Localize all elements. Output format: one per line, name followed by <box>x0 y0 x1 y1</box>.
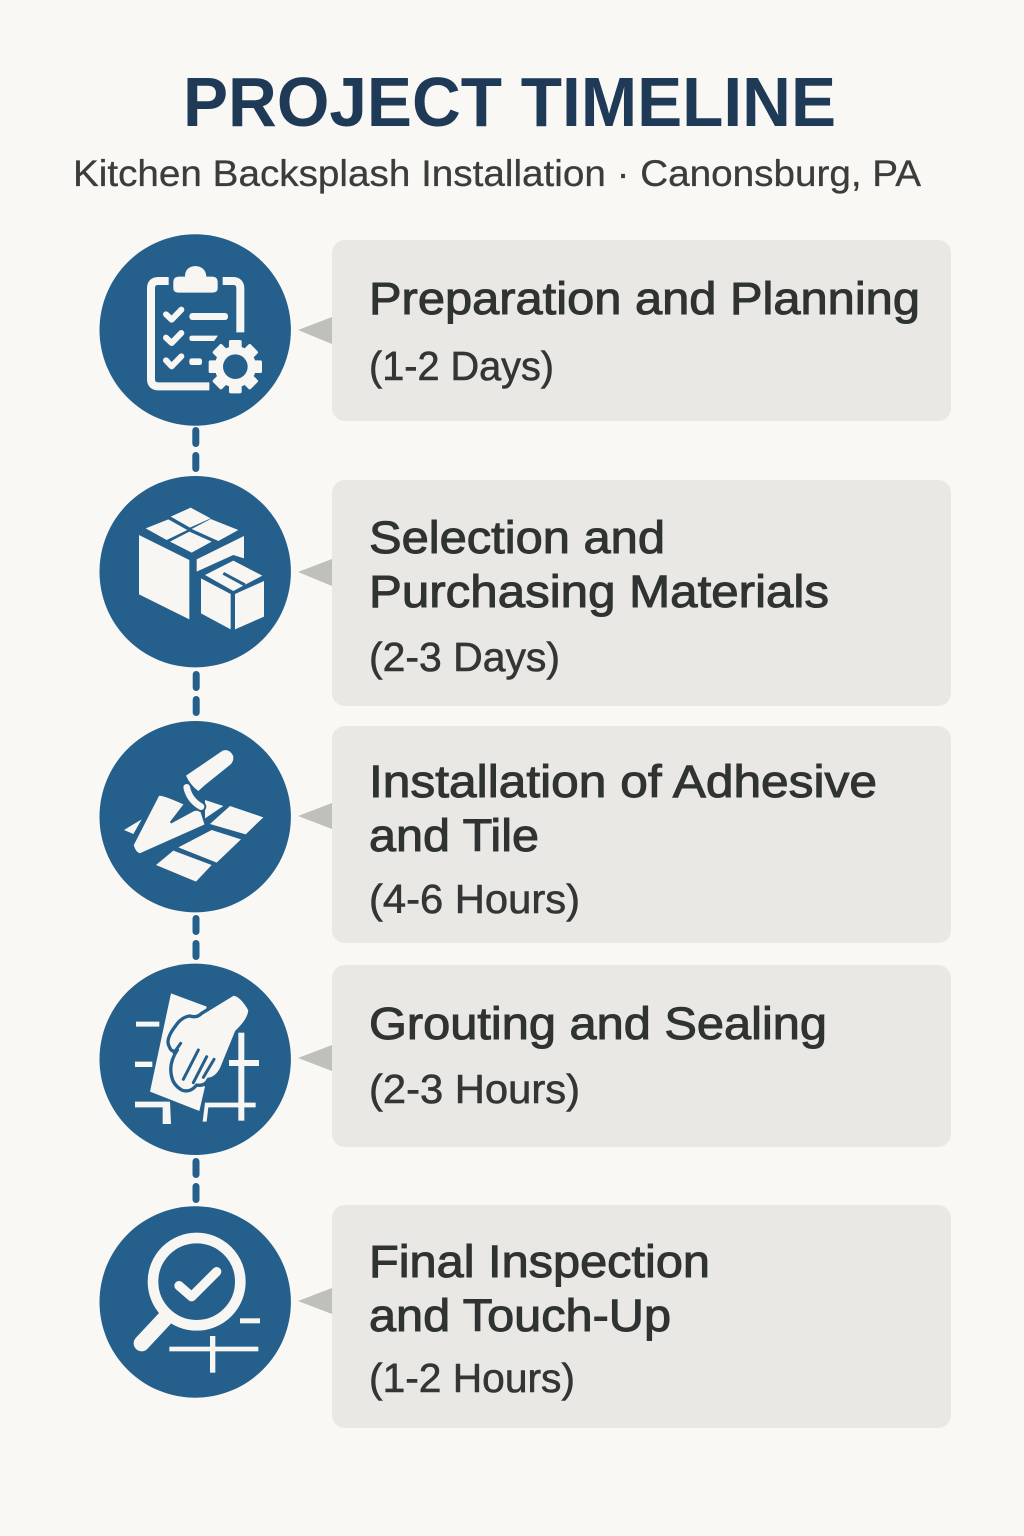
step duration: (4-6 Hours) <box>369 876 580 922</box>
card <box>332 240 951 421</box>
pointer <box>298 317 332 344</box>
circle badge with hand and grout float icon <box>100 964 291 1155</box>
card <box>332 480 951 706</box>
step title: Installation of Adhesive <box>369 756 877 807</box>
step title: Selection and <box>369 512 665 563</box>
step duration: (2-3 Days) <box>369 634 560 680</box>
step title <box>369 1236 710 1341</box>
step title <box>369 512 829 617</box>
pointer <box>298 1045 332 1071</box>
connector: step 2 to 3 <box>193 671 200 716</box>
card <box>332 1205 951 1428</box>
step duration: (1-2 Hours) <box>369 1355 575 1401</box>
step title: Grouting and Sealing <box>369 998 827 1049</box>
connector: step 4 to 5 <box>192 1158 200 1203</box>
circle badge with boxes icon <box>100 476 291 667</box>
step title: Final Inspection <box>369 1236 710 1287</box>
card <box>332 965 951 1147</box>
pointer <box>298 559 332 586</box>
step title <box>369 756 877 861</box>
step title: and Touch-Up <box>369 1290 671 1341</box>
step title: Purchasing Materials <box>369 566 829 617</box>
step 2: selection and purchasing materials <box>100 476 951 706</box>
circle badge with trowel and tile icon <box>100 721 291 912</box>
connector: step 1 to 2 <box>192 427 199 472</box>
step title: and Tile <box>369 810 539 861</box>
card <box>332 726 951 943</box>
step title: Preparation and Planning <box>369 273 920 324</box>
title: PROJECT TIMELINE <box>183 63 836 141</box>
step 4: grouting and sealing <box>100 964 951 1155</box>
connector: step 3 to 4 <box>192 915 200 960</box>
step duration: (2-3 Hours) <box>369 1066 580 1112</box>
step duration: (1-2 Days) <box>369 343 554 389</box>
circle badge with magnifier icon <box>100 1206 291 1398</box>
subtitle: Kitchen Backsplash Installation · Canonsburg, PA <box>73 153 921 194</box>
step 5: final inspection and touch-up <box>100 1205 951 1428</box>
step 3: installation of adhesive and tile <box>100 721 951 943</box>
pointer <box>298 803 332 829</box>
pointer <box>298 1288 332 1314</box>
circle badge with clipboard icon <box>100 234 291 426</box>
step 1: preparation and planning <box>100 234 951 426</box>
